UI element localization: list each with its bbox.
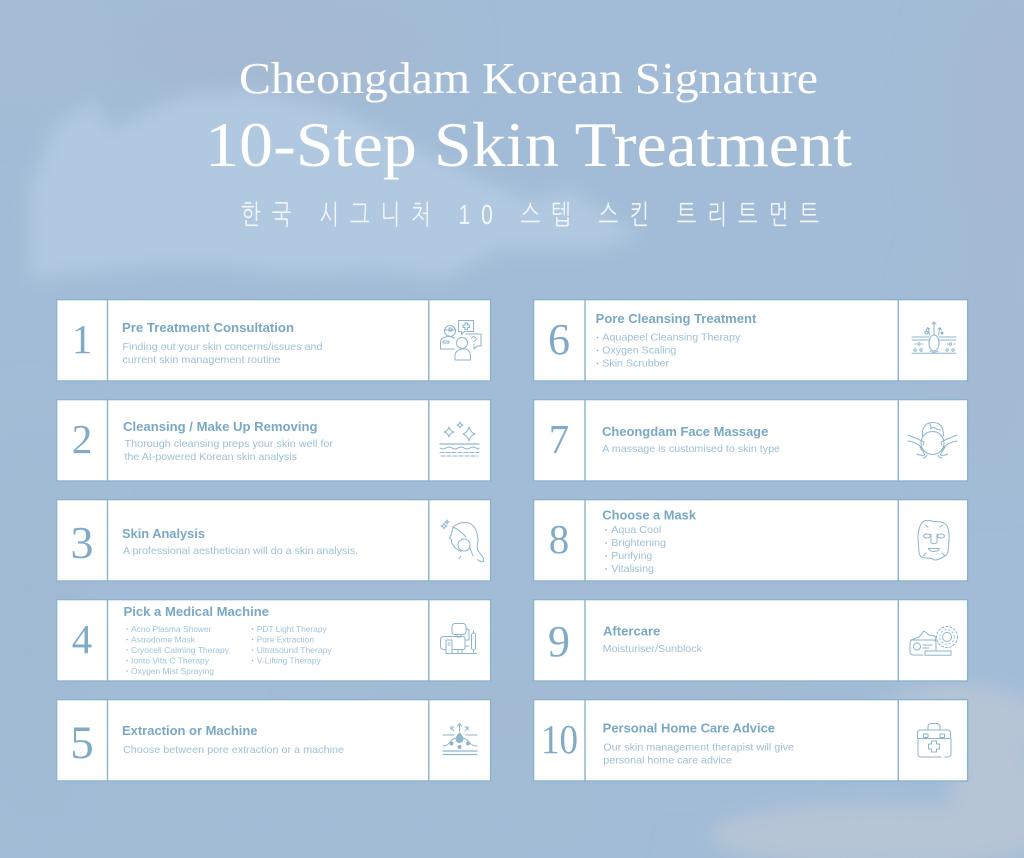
list: Brightening (611, 537, 666, 549)
icon: pore extraction (443, 724, 477, 754)
description: Thorough cleansing preps your skin well for (124, 438, 334, 450)
icon: medical machine (440, 624, 477, 654)
heading: Choose a Mask: Choose a Mask (602, 508, 696, 522)
description: current skin management routine (122, 354, 281, 366)
number 2: 2 (72, 416, 92, 462)
description: the AI-powered Korean skin analysis (124, 451, 297, 463)
heading: Aftercare: Aftercare (603, 624, 660, 638)
subtitle: Korean: 한국 시그니처 10 스텝 스킨 트리트먼트 (241, 200, 819, 231)
icon: face analysis (441, 520, 484, 562)
description (603, 742, 794, 767)
description: Choose between pore extraction or a machine (123, 744, 344, 756)
treatment list column 1: Ionto Vita C Therapy (131, 656, 210, 666)
treatment list column 2 (252, 624, 332, 666)
step 7 panel (534, 400, 968, 481)
list: Aqua Cool (611, 524, 661, 536)
step 5 panel (57, 700, 491, 781)
title: Cheongdam Korean Signature: Cheongdam Korean Signature (239, 54, 818, 103)
treatment list column 1: Acno Plasma Shower (131, 624, 212, 634)
icon: first aid kit (918, 724, 951, 757)
icon: face mask (918, 520, 949, 560)
treatment list column 1: Cryocell Calming Therapy (131, 645, 230, 655)
list (597, 332, 741, 370)
description (122, 341, 323, 366)
description: A professional aesthetician will do a skin analysis. (123, 545, 358, 557)
heading: Pick a Medical Machine: Pick a Medical Machine (124, 605, 269, 619)
description (124, 438, 334, 463)
number 3: 3 (70, 517, 94, 568)
description: Our skin management therapist will give (603, 742, 794, 754)
list: Aquapeel Cleansing Therapy (602, 332, 741, 344)
number 6: 6 (548, 315, 570, 364)
list: Vitalising (611, 563, 654, 575)
cloud lower right (710, 685, 1024, 858)
step 8 panel (534, 500, 968, 581)
description: A massage is customised to skin type (602, 443, 780, 455)
number 7: 7 (549, 416, 569, 462)
number 8: 8 (549, 516, 569, 562)
number 1: 1 (72, 316, 92, 362)
treatment list column 2: V-Lifting Therapy (257, 656, 321, 666)
treatment list column 2: Ultrasound Therapy (257, 645, 332, 655)
title: 10-Step Skin Treatment: 10-Step Skin Treatment (205, 109, 852, 180)
list: Purifying (611, 550, 652, 562)
icon: sparkles over skin (440, 422, 479, 456)
step 10 panel (534, 700, 968, 781)
heading: Pore Cleansing Treatment: Pore Cleansing Treatment (596, 312, 757, 326)
cloud left (28, 90, 640, 280)
heading: Extraction or Machine: Extraction or Machine (122, 724, 258, 738)
treatment list column 1 (126, 624, 230, 676)
heading: Skin Analysis: Skin Analysis (122, 527, 205, 541)
number 9: 9 (548, 617, 570, 666)
treatment list column 2: PDT Light Therapy (257, 624, 327, 634)
heading: Pre Treatment Consultation: Pre Treatment Consultation (122, 321, 294, 335)
icon: face massage (908, 422, 957, 458)
list: Oxygen Scaling (602, 345, 676, 357)
step 3 panel (57, 500, 491, 581)
icon: pore cleansing (912, 322, 956, 353)
step 1 panel (57, 300, 491, 381)
list (605, 524, 666, 575)
heading: Cheongdam Face Massage: Cheongdam Face Massage (602, 425, 768, 439)
heading: Personal Home Care Advice: Personal Home Care Advice (603, 721, 775, 735)
treatment list column 1: Astrodome Mask (131, 634, 196, 644)
description: Finding out your skin concerns/issues and (122, 341, 323, 353)
heading: Cleansing / Make Up Removing: Cleansing / Make Up Removing (123, 420, 318, 434)
step 9 panel (534, 600, 968, 681)
step 6 panel (534, 300, 968, 381)
number 10: 10 (541, 716, 578, 762)
number 5: 5 (70, 717, 94, 769)
icon: consultation (440, 320, 481, 360)
treatment list column 1: Oxygen Mist Spraying (131, 666, 214, 676)
treatment list column 2: Pore Extraction (257, 634, 314, 644)
list: Skin Scrubber (602, 358, 670, 370)
description: personal home care advice (603, 755, 732, 767)
icon: moisturiser and sunblock (910, 626, 958, 655)
description: Moisturiser/Sunblock (603, 643, 703, 655)
number 4: 4 (72, 616, 92, 662)
step 2 panel (57, 400, 491, 481)
step 4 panel (57, 600, 491, 681)
